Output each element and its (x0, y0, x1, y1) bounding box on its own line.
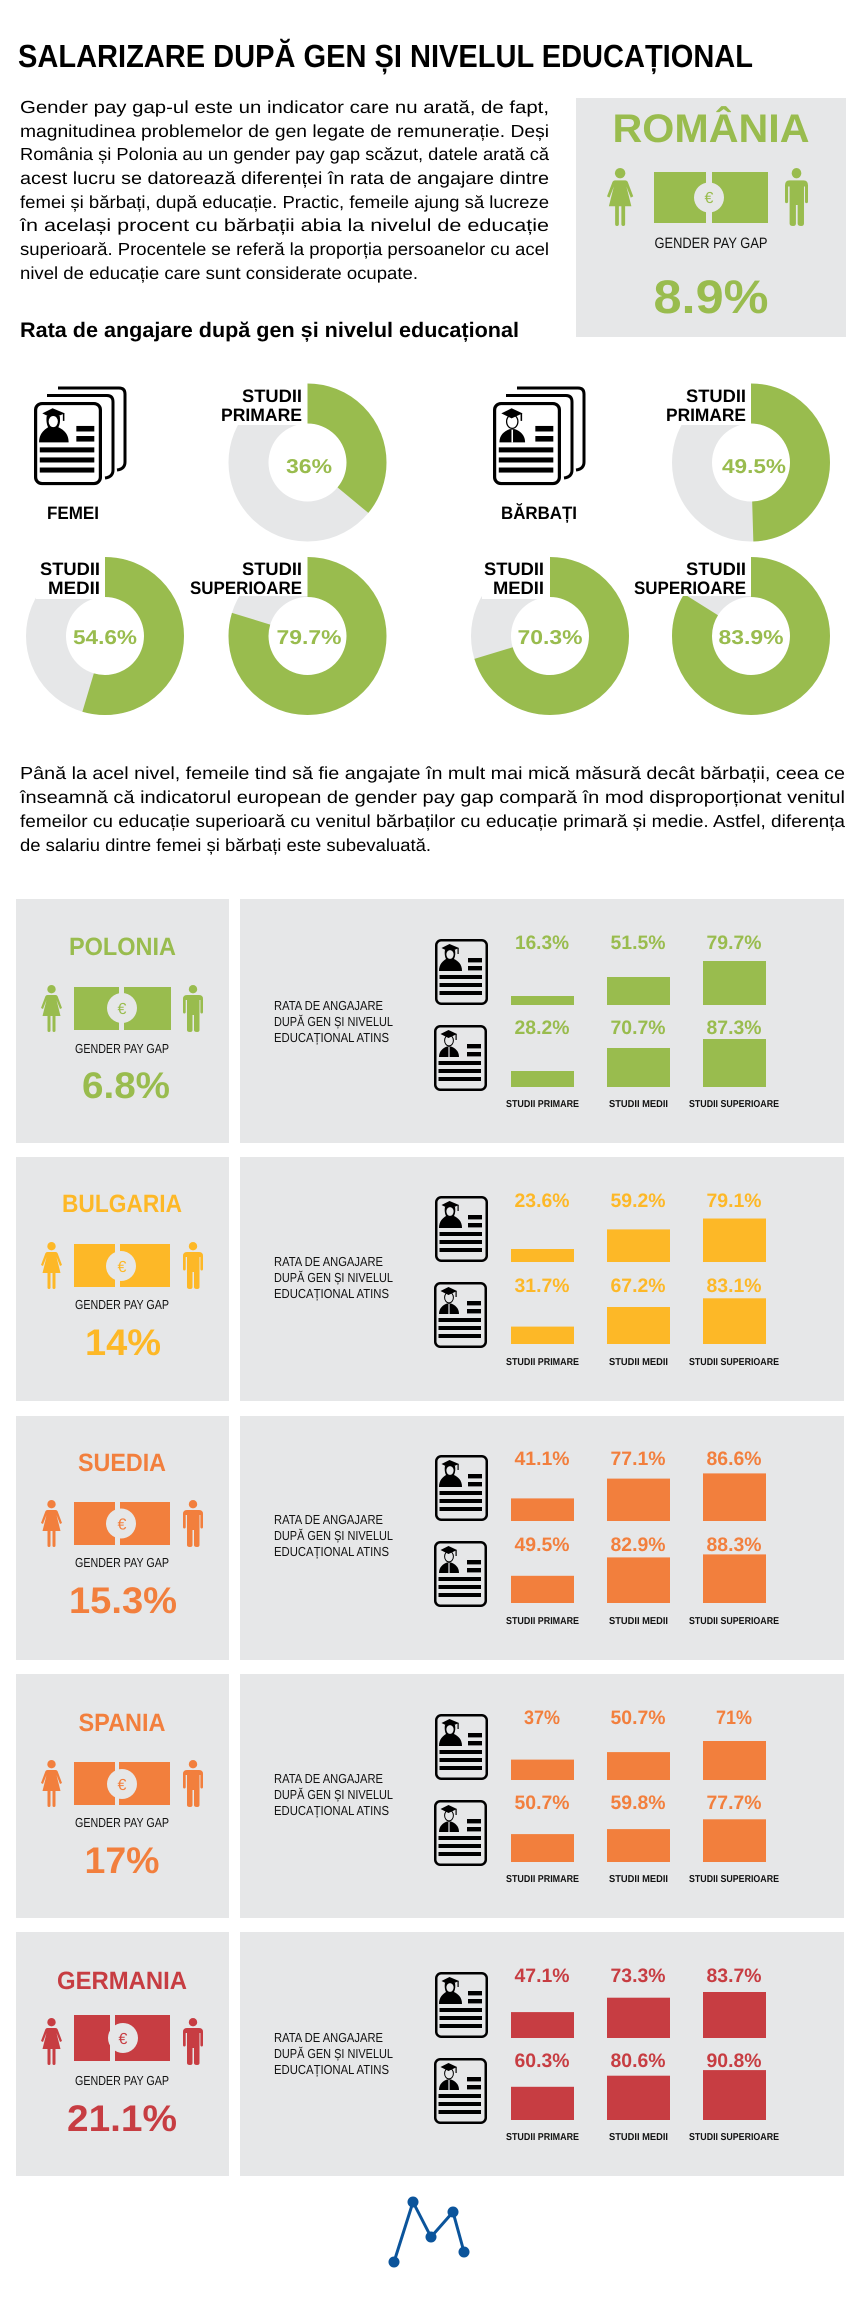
icon: money with euro (654, 172, 768, 223)
icon: money with euro: € (705, 190, 714, 207)
icon: man document (435, 1542, 486, 1606)
donut: femei studii primare 36%: PRIMARE (221, 405, 302, 425)
intro text block: nivel de educație care sunt considerate ocupate. (20, 263, 418, 283)
bars: men (511, 1819, 766, 1862)
value: 14%: 14% (85, 1322, 161, 1363)
values: 88.3% (706, 1534, 762, 1556)
value: 17%: 17% (84, 1840, 160, 1881)
icon: money with euro (74, 1244, 170, 1287)
panel: Germania employment bars (240, 1932, 844, 2176)
donut: femei studii medii 54.6%: STUDII (40, 559, 100, 579)
values: 87.3% (706, 1017, 762, 1039)
country name: Germania: GERMANIA (57, 1967, 187, 1995)
intro text block (19, 97, 549, 283)
values: 16.3% (515, 932, 569, 954)
icon: woman (41, 985, 62, 1032)
description: RATA DE ANGAJARE (274, 1254, 383, 1269)
icon: man (183, 985, 203, 1032)
description: DUPĂ GEN ȘI NIVELUL (274, 1270, 393, 1285)
values: 49.5% (514, 1534, 570, 1556)
icon: man document (435, 1026, 486, 1090)
heading: employment rate: Rata de angajare după gen și nivelul educațional (20, 319, 519, 342)
label: gender pay gap: GENDER PAY GAP (75, 2073, 169, 2088)
category labels: STUDII MEDII (609, 1874, 668, 1885)
icon: man (183, 1242, 203, 1289)
category labels (506, 1357, 779, 1368)
description: EDUCAȚIONAL ATINS (274, 1803, 389, 1818)
donut: bărbați studii superioare 83.9%: STUDII (686, 559, 746, 579)
description: RATA DE ANGAJARE (274, 2030, 383, 2045)
donut: bărbați studii medii 70.3% (482, 557, 609, 695)
logo: connected M (388, 2196, 470, 2268)
description: EDUCAȚIONAL ATINS (274, 1286, 389, 1301)
icon: money with euro: € (118, 1001, 127, 1018)
icon: money with euro: € (118, 1259, 127, 1276)
values: 83.1% (706, 1275, 762, 1297)
title: SALARIZARE DUPĂ GEN ȘI NIVELUL EDUCAȚIONAL (18, 38, 753, 75)
intro text block: femei și bărbați, după educație. Practic, femeile ajung să lucreze (20, 192, 549, 212)
icon: woman document (436, 940, 487, 1004)
description: DUPĂ GEN ȘI NIVELUL (274, 1787, 393, 1802)
values: 82.9% (610, 1534, 666, 1556)
icon: man document (435, 1801, 486, 1865)
icon: woman (41, 1242, 62, 1289)
description: DUPĂ GEN ȘI NIVELUL (274, 1014, 393, 1029)
icon: money with euro (74, 1762, 170, 1805)
donut: bărbați studii primare 49.5%: 49.5% (722, 456, 786, 478)
bars: women (511, 1473, 766, 1521)
values: 77.7% (706, 1792, 762, 1814)
category labels: STUDII SUPERIOARE (689, 1874, 779, 1885)
description: EDUCAȚIONAL ATINS (274, 2062, 389, 2077)
donut: femei studii superioare 79.7%: STUDII (242, 559, 302, 579)
description: RATA DE ANGAJARE (274, 1771, 383, 1786)
values: 71% (716, 1707, 752, 1729)
panel: Polonia summary (16, 899, 229, 1143)
category labels: STUDII MEDII (609, 1357, 668, 1368)
values: 28.2% (514, 1017, 570, 1039)
intro text block: Gender pay gap-ul este un indicator care nu arată, de fapt, (20, 97, 549, 117)
label: gender pay gap: GENDER PAY GAP (75, 1041, 169, 1056)
description: DUPĂ GEN ȘI NIVELUL (274, 2046, 393, 2061)
values: 70.7% (610, 1017, 666, 1039)
icon: man document (435, 1283, 486, 1347)
icon: money with euro: € (119, 2031, 128, 2048)
bars: men (511, 1039, 766, 1087)
values: 47.1% (514, 1965, 570, 1987)
values: 79.1% (706, 1190, 762, 1212)
description (274, 1254, 393, 1301)
category labels: STUDII SUPERIOARE (689, 1357, 779, 1368)
donut: femei studii medii 54.6% (36, 557, 164, 695)
label: femei: FEMEI (47, 503, 99, 523)
icon: woman (41, 2018, 62, 2065)
description: EDUCAȚIONAL ATINS (274, 1030, 389, 1045)
category labels: STUDII MEDII (609, 1099, 668, 1110)
icon: man (183, 2018, 203, 2065)
bars: men (511, 1554, 766, 1603)
icon: man document (435, 2059, 486, 2123)
values: 77.1% (610, 1448, 666, 1470)
country name: Polonia: POLONIA (69, 933, 176, 961)
description: DUPĂ GEN ȘI NIVELUL (274, 1528, 393, 1543)
values: 23.6% (514, 1190, 570, 1212)
description (274, 998, 393, 1045)
panel: România (576, 98, 846, 337)
values: 59.2% (610, 1190, 666, 1212)
values: 80.6% (610, 2050, 666, 2072)
intro text block: superioară. Procentele se referă la proporția persoanelor cu acel (20, 239, 549, 259)
second text block (19, 763, 845, 855)
icon: money with euro: € (118, 1777, 127, 1794)
panel: Germania summary (16, 1932, 229, 2176)
category labels: STUDII PRIMARE (506, 1616, 579, 1627)
values: 83.7% (706, 1965, 762, 1987)
donut: bărbați studii medii 70.3%: MEDII (493, 578, 544, 598)
donut: femei studii primare 36%: 36% (286, 456, 332, 478)
category labels: STUDII PRIMARE (506, 1357, 579, 1368)
values: 79.7% (706, 932, 762, 954)
values: 73.3% (610, 1965, 666, 1987)
panel: Bulgaria summary (16, 1157, 229, 1401)
icon: woman document (436, 1197, 487, 1261)
intro text block: în același procent cu bărbații abia la nivelul de educație (19, 215, 549, 235)
icon: woman document (436, 1456, 487, 1520)
values: 60.3% (514, 2050, 570, 2072)
panel: Bulgaria employment bars (240, 1157, 844, 1401)
second text block: de salariu dintre femei și bărbați este subevaluată. (20, 835, 431, 855)
icon: woman (607, 168, 633, 226)
icon: money with euro (74, 2015, 170, 2061)
icon: men document stack (495, 388, 584, 484)
country name: Bulgaria: BULGARIA (62, 1190, 182, 1218)
intro text block: magnitudinea problemelor de gen legate de remunerație. Deși (20, 121, 549, 141)
values: 50.7% (514, 1792, 570, 1814)
donut: femei studii superioare 79.7% (186, 557, 366, 695)
values (514, 1448, 762, 1556)
label: gender pay gap: GENDER PAY GAP (75, 1555, 169, 1570)
label: gender pay gap: GENDER PAY GAP (75, 1297, 169, 1312)
panel: Spania summary (16, 1674, 229, 1918)
value: 15.3%: 15.3% (69, 1580, 177, 1621)
category labels: STUDII MEDII (609, 1616, 668, 1627)
bars: women (511, 1992, 766, 2038)
values: 59.8% (610, 1792, 666, 1814)
second text block: femeilor cu educație superioară cu venitul bărbaților cu educație primară și medie. Astfel, diferența (20, 811, 845, 831)
icon: woman document (436, 1715, 487, 1779)
values: 50.7% (610, 1707, 666, 1729)
donut: bărbați studii medii 70.3%: 70.3% (518, 627, 583, 649)
donut: bărbați studii medii 70.3%: STUDII (484, 559, 544, 579)
category labels (506, 1616, 779, 1627)
values: 41.1% (514, 1448, 570, 1470)
donut: bărbați studii primare 49.5%: STUDII (686, 386, 746, 406)
country name: România: ROMÂNIA (612, 106, 810, 151)
icon: woman (41, 1760, 62, 1807)
intro text block: România și Polonia au un gender pay gap scăzut, datele arată că (20, 144, 549, 164)
values (514, 1965, 762, 2072)
label: gender pay gap: GENDER PAY GAP (654, 235, 768, 252)
icon: man (785, 168, 808, 226)
donut: bărbați studii superioare 83.9%: 83.9% (718, 627, 784, 649)
values: 67.2% (610, 1275, 666, 1297)
category labels: STUDII PRIMARE (506, 2132, 579, 2143)
second text block: înseamnă că indicatorul european de gender pay gap compară în mod disproporționat venitul (19, 787, 845, 807)
donut: femei studii superioare 79.7%: 79.7% (276, 627, 342, 649)
bars: women (511, 1218, 766, 1262)
category labels (506, 2132, 779, 2143)
donut: femei studii superioare 79.7%: SUPERIOARE (190, 578, 302, 598)
icon: money with euro (74, 987, 171, 1030)
description: RATA DE ANGAJARE (274, 998, 383, 1013)
panel: Spania employment bars (240, 1674, 844, 1918)
values (514, 1190, 762, 1297)
label: gender pay gap: GENDER PAY GAP (75, 1815, 169, 1830)
category labels: STUDII SUPERIOARE (689, 1099, 779, 1110)
description (274, 1771, 393, 1818)
donut: bărbați studii superioare 83.9% (630, 557, 810, 695)
values (514, 1707, 762, 1814)
country name: Spania: SPANIA (78, 1709, 166, 1737)
value: 8.9%: 8.9% (654, 270, 768, 323)
values: 31.7% (514, 1275, 570, 1297)
category labels: STUDII MEDII (609, 2132, 668, 2143)
description: RATA DE ANGAJARE (274, 1512, 383, 1527)
category labels: STUDII PRIMARE (506, 1874, 579, 1885)
panel: Polonia employment bars (240, 899, 844, 1143)
values: 51.5% (610, 932, 666, 954)
values (514, 932, 762, 1039)
country name: Suedia: SUEDIA (78, 1449, 166, 1477)
values: 90.8% (706, 2050, 762, 2072)
panel: Suedia summary (16, 1416, 229, 1660)
category labels: STUDII SUPERIOARE (689, 2132, 779, 2143)
category labels: STUDII PRIMARE (506, 1099, 579, 1110)
category labels (506, 1874, 779, 1885)
values: 86.6% (706, 1448, 762, 1470)
donut: bărbați studii primare 49.5%: PRIMARE (666, 405, 746, 425)
intro text block: acest lucru se datorează diferenței în rata de angajare dintre (20, 168, 549, 188)
panel: Suedia employment bars (240, 1416, 844, 1660)
donut: femei studii primare 36% (218, 383, 366, 522)
description: EDUCAȚIONAL ATINS (274, 1544, 389, 1559)
description (274, 1512, 393, 1559)
icon: money with euro: € (118, 1516, 127, 1534)
value: 6.8%: 6.8% (82, 1065, 170, 1106)
category labels (506, 1099, 779, 1110)
bars: women (511, 1741, 766, 1780)
icon: women document stack (36, 388, 125, 484)
icon: money with euro (74, 1502, 170, 1545)
second text block: Până la acel nivel, femeile tind să fie angajate în mult mai mică măsură decât bărbații, ceea ce (20, 763, 845, 783)
description (274, 2030, 393, 2077)
donut: femei studii medii 54.6%: MEDII (48, 578, 100, 598)
icon: man (183, 1500, 203, 1547)
donut: femei studii medii 54.6%: 54.6% (73, 627, 137, 649)
values: 37% (524, 1707, 560, 1729)
bars: men (511, 2070, 766, 2120)
donut: bărbați studii superioare 83.9%: SUPERIOARE (634, 578, 746, 598)
donut: bărbați studii primare 49.5% (662, 383, 810, 522)
bars: men (511, 1298, 766, 1344)
label: bărbați: BĂRBAȚI (501, 503, 577, 523)
bars: women (511, 961, 766, 1005)
category labels: STUDII SUPERIOARE (689, 1616, 779, 1627)
value: 21.1%: 21.1% (67, 2098, 177, 2139)
icon: woman document (436, 1973, 487, 2037)
donut: femei studii primare 36%: STUDII (242, 386, 302, 406)
icon: woman (41, 1500, 62, 1547)
icon: man (183, 1760, 203, 1807)
